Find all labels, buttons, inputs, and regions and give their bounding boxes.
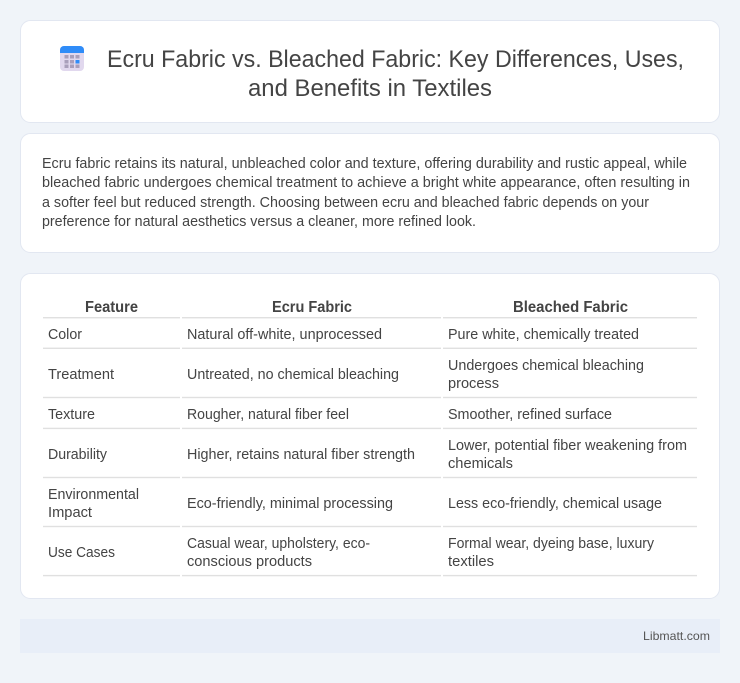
panel: comparison table xyxy=(20,274,720,598)
table header row: Feature xyxy=(85,299,138,316)
row: use cases xyxy=(48,536,655,570)
icon: calendar xyxy=(60,46,84,71)
row: treatment: process xyxy=(448,376,499,392)
row: use cases: Casual wear, upholstery, eco- xyxy=(187,536,370,552)
row: durability: chemicals xyxy=(448,456,513,472)
row: environmental impact: Eco-friendly, minimal processing xyxy=(187,496,393,512)
row: texture: Smoother, refined surface xyxy=(448,407,612,423)
row: durability: Durability xyxy=(48,447,108,463)
row: treatment: Treatment xyxy=(48,367,114,383)
intro text: preference for natural aesthetics versus a cleaner, more refined look. xyxy=(42,214,476,230)
footer bar xyxy=(20,619,720,653)
title: and Benefits in Textiles xyxy=(248,75,492,102)
intro text: bleached fabric undergoes chemical treatment to achieve a bright white appearance, often resulting in xyxy=(42,175,690,191)
table header row: Ecru Fabric xyxy=(272,299,352,316)
row: texture: Rougher, natural fiber feel xyxy=(187,407,349,423)
intro text: a softer feel but reduced strength. Choosing between ecru and bleached fabric depends on your xyxy=(42,195,649,211)
row: texture xyxy=(48,407,612,423)
panel: header xyxy=(20,20,720,122)
footer text: Libmatt.com xyxy=(643,629,710,643)
row: treatment: Untreated, no chemical bleaching xyxy=(187,367,399,383)
row: texture: Texture xyxy=(48,407,95,423)
title xyxy=(107,46,684,102)
row: treatment: Undergoes chemical bleaching xyxy=(448,358,644,374)
table header row xyxy=(85,299,628,316)
row: durability: Lower, potential fiber weakening from xyxy=(448,438,687,454)
title: Ecru Fabric vs. Bleached Fabric: Key Differences, Uses, xyxy=(107,46,684,73)
panel: intro xyxy=(20,134,720,252)
row: color: Pure white, chemically treated xyxy=(448,327,639,343)
row: durability: Higher, retains natural fiber strength xyxy=(187,447,415,463)
intro text: Ecru fabric retains its natural, unbleached color and texture, offering durability and rustic appeal, while xyxy=(42,156,687,172)
row: environmental impact: Impact xyxy=(48,505,92,521)
intro text xyxy=(42,156,690,230)
row: color: Color xyxy=(48,327,82,343)
row: environmental impact: Less eco-friendly, chemical usage xyxy=(448,496,662,512)
row: use cases: Use Cases xyxy=(48,545,115,561)
row: durability xyxy=(48,438,687,472)
row: treatment xyxy=(48,358,644,392)
row: use cases: Formal wear, dyeing base, luxury xyxy=(448,536,655,552)
row: use cases: conscious products xyxy=(187,554,312,570)
row: environmental impact: Environmental xyxy=(48,487,139,503)
row: use cases: textiles xyxy=(448,554,494,570)
row: color xyxy=(48,327,639,343)
table header row: Bleached Fabric xyxy=(513,299,628,316)
row: color: Natural off-white, unprocessed xyxy=(187,327,382,343)
row: environmental impact xyxy=(48,487,662,521)
